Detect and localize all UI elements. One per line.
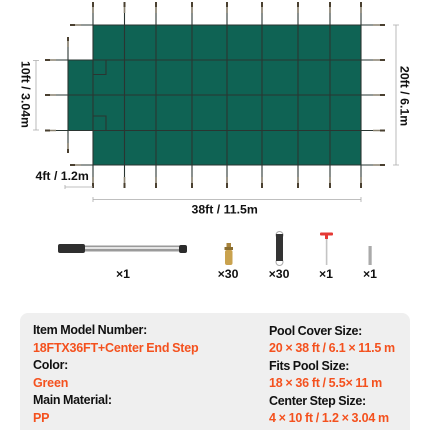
dimension label: step width: 4ft / 1.2m	[36, 169, 89, 183]
spec: item model number: Item Model Number:	[33, 323, 147, 337]
spec: main material: Main Material:	[33, 393, 112, 407]
accessory: T handle tool	[320, 232, 333, 265]
spec: pool cover size: Pool Cover Size:	[269, 324, 362, 338]
quantity labels: ×1	[363, 267, 377, 281]
spec: model value: 18FTX36FT+Center End Step	[33, 341, 198, 355]
quantity labels: ×1	[116, 267, 130, 281]
spec: color: Color:	[33, 358, 68, 372]
spec: fits pool size: Fits Pool Size:	[269, 359, 349, 373]
quantity labels: ×1	[319, 267, 333, 281]
spec: step value: 4 × 10 ft / 1.2 × 3.04 m	[269, 411, 389, 425]
accessory: drill bit	[368, 246, 372, 265]
dimension label: step height: 10ft / 3.04m	[18, 61, 32, 128]
straps and anchors	[45, 2, 385, 188]
dimension label: cover length: 38ft / 11.5m	[192, 202, 258, 216]
quantity labels: ×30	[218, 267, 239, 281]
quantity labels	[116, 267, 377, 281]
dimension label: cover width: 20ft / 6.1m	[398, 66, 412, 126]
accessory: installation rod	[58, 244, 187, 253]
specification panel	[20, 313, 410, 430]
pool cover diagram	[18, 2, 412, 281]
accessory: brass anchor	[224, 243, 233, 265]
dimension lines	[33, 25, 399, 202]
green cover	[68, 25, 361, 165]
spec: cover size value: 20 × 38 ft / 6.1 × 11.5 m	[269, 341, 395, 355]
spec: color value: Green	[33, 376, 68, 390]
spec: center step size: Center Step Size:	[269, 394, 366, 408]
spec: material value: PP	[33, 411, 49, 425]
accessory: spring	[276, 232, 283, 266]
quantity labels: ×30	[269, 267, 290, 281]
spec: fits value: 18 × 36 ft / 5.5× 11 m	[269, 376, 382, 390]
